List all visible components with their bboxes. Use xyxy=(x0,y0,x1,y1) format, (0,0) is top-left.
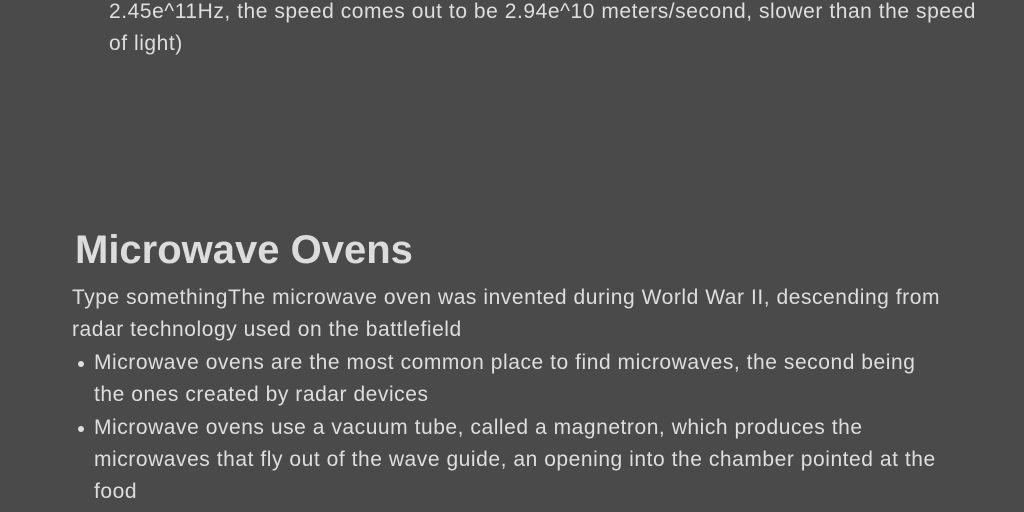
text block: intro paragraph: Type somethingThe microwave oven was invented during World War II, descending from xyxy=(72,286,940,309)
bullet list xyxy=(78,351,936,503)
text block: intro paragraph xyxy=(72,286,940,341)
text block: top continuation: of light) xyxy=(109,32,183,55)
text block: intro paragraph: radar technology used on the battlefield xyxy=(72,318,462,341)
bullet 2: Microwave ovens use a vacuum tube, called a magnetron, which produces the xyxy=(94,416,863,439)
heading: Microwave Ovens xyxy=(75,228,413,272)
text block: top continuation: 2.45e^11Hz, the speed comes out to be 2.94e^10 meters/second, slower than the speed xyxy=(109,0,976,23)
bullet 2: food xyxy=(94,480,137,503)
bullet 2: microwaves that fly out of the wave guide, an opening into the chamber pointed at the xyxy=(94,448,936,471)
bullet 1: the ones created by radar devices xyxy=(94,383,429,406)
bullet 1 xyxy=(78,351,915,406)
text block: top continuation xyxy=(109,0,976,55)
bullet 1: Microwave ovens are the most common place to find microwaves, the second being xyxy=(94,351,915,374)
bullet 2 xyxy=(78,416,936,503)
